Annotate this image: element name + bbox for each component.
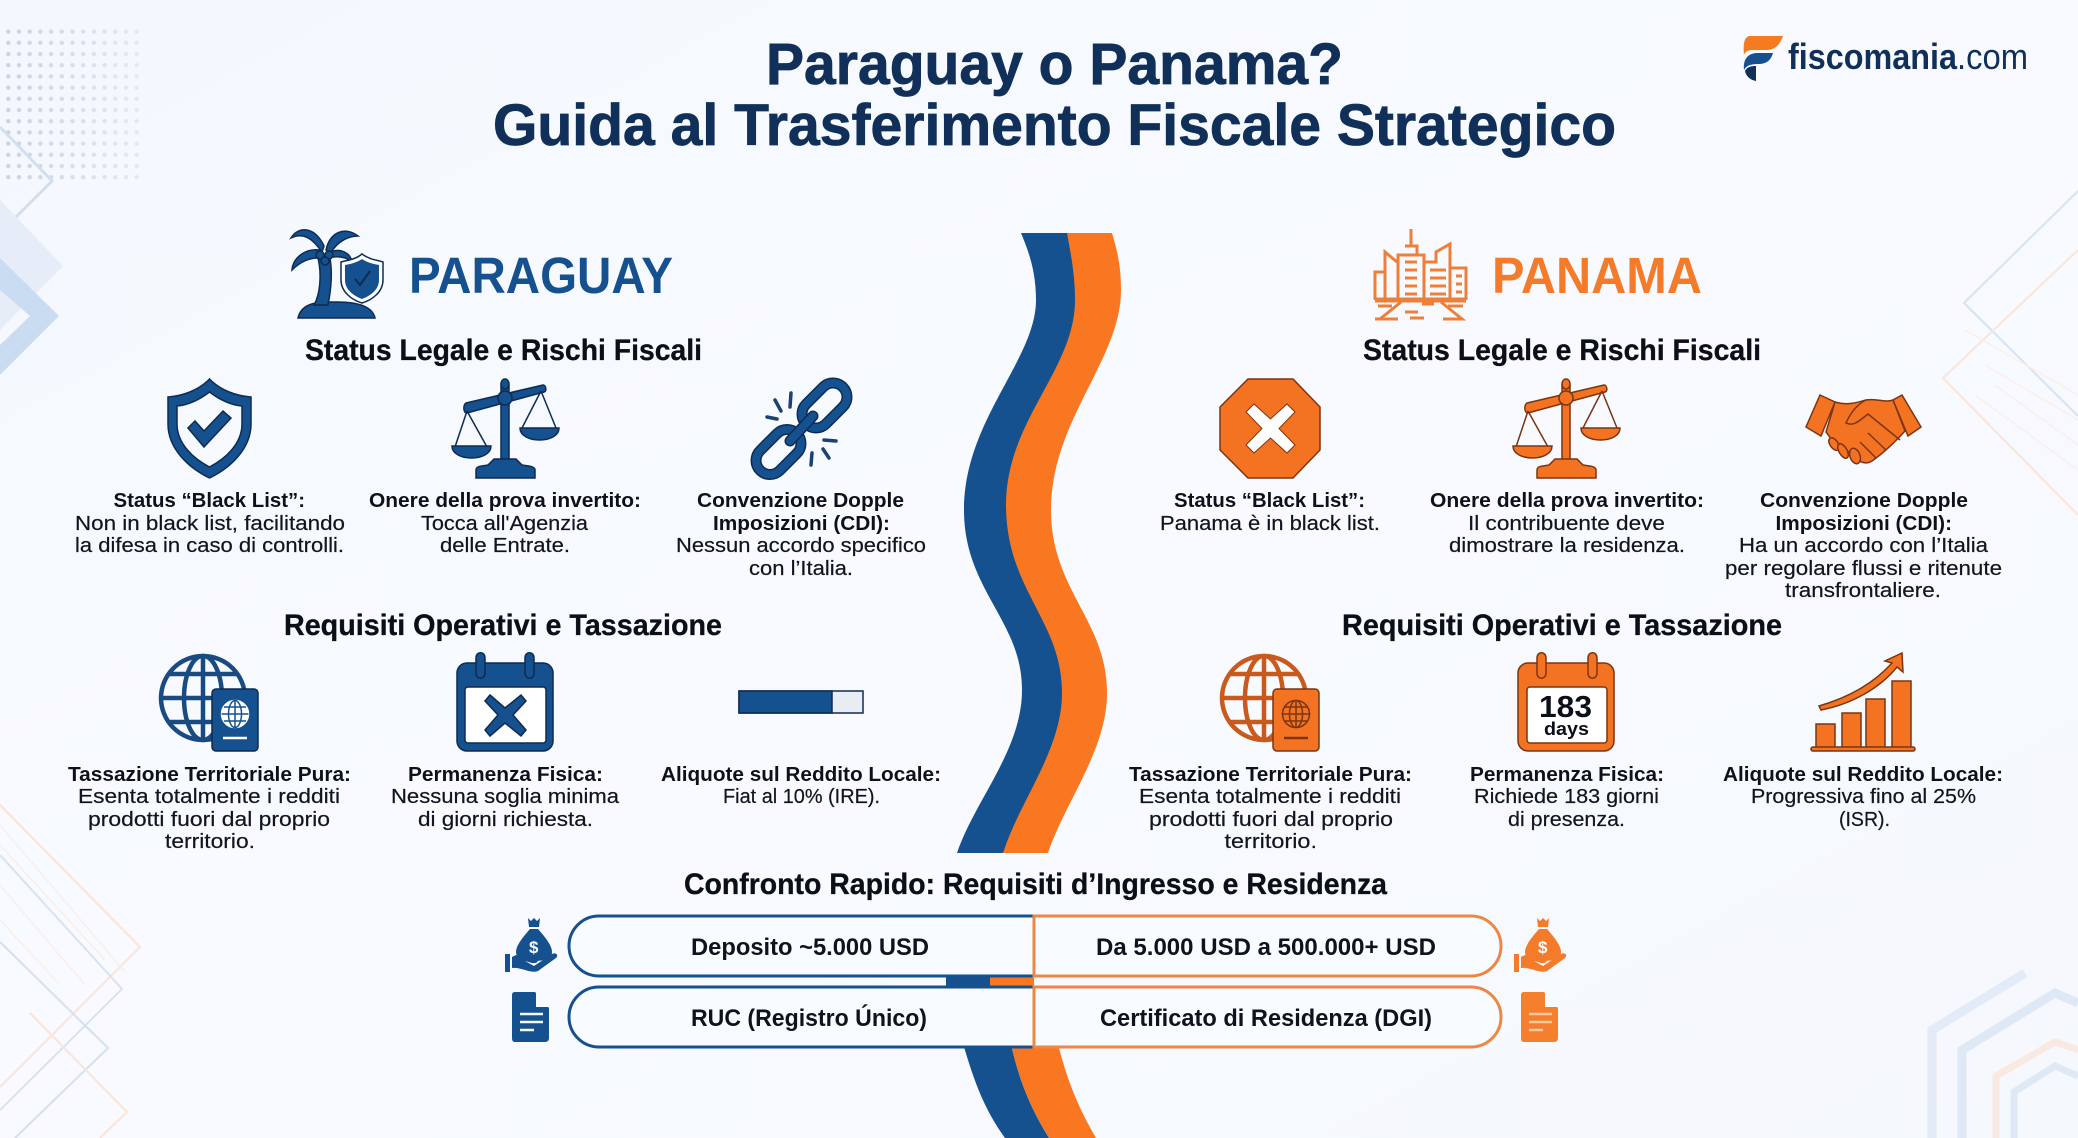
text: tassazione: Esenta totalmente i redditi: [78, 785, 340, 808]
text: status black list: Panama è in black list.: [1160, 512, 1380, 535]
text: aliquote: Progressiva fino al 25%: [1751, 785, 1976, 808]
row: deposit: [569, 916, 1501, 976]
text: onere della prova: Tocca all'Agenzia: [421, 512, 589, 535]
text: tassazione: territorio.: [1224, 830, 1317, 853]
text: permanenza: di presenza.: [1508, 808, 1625, 831]
panel: Panama: [1129, 229, 2003, 853]
text: aliquote: Aliquote sul Reddito Locale:: [661, 763, 941, 786]
text: permanenza: [391, 763, 620, 831]
icon: calendar 183 days: 183: [1539, 689, 1592, 724]
brand domain: .com: [1957, 36, 2028, 77]
icon: globe and passport: [161, 656, 258, 751]
brand name: fiscomania: [1788, 36, 1958, 77]
heading: status: Status Legale e Rischi Fiscali: [305, 334, 702, 367]
text: onere della prova: [369, 489, 641, 557]
text: convenzione: transfrontaliere.: [1785, 579, 1941, 602]
text: tassazione: Tassazione Territoriale Pura:: [68, 763, 351, 786]
text: tassazione: prodotti fuori dal proprio: [88, 808, 330, 831]
text: convenzione: Imposizioni (CDI):: [1776, 512, 1952, 535]
text: convenzione: Ha un accordo con l’Italia: [1739, 534, 1989, 557]
text: aliquote: Fiat al 10% (IRE).: [723, 785, 880, 808]
heading: confronto: Confronto Rapido: Requisiti d’Ingresso e Residenza: [684, 868, 1388, 901]
title: Paraguay o Panama?: [766, 32, 1343, 97]
icon: handshake: [1806, 395, 1921, 465]
heading: status: Status Legale e Rischi Fiscali: [1363, 334, 1761, 367]
icon: scales: [1513, 379, 1620, 478]
text: status black list: Status “Black List”:: [1174, 489, 1365, 512]
icon: calendar 183 days: [1518, 653, 1614, 751]
text: onere della prova: dimostrare la residenza.: [1449, 534, 1685, 557]
text: onere della prova: Il contribuente deve: [1468, 512, 1665, 535]
logo: fiscomania: [1744, 36, 2028, 81]
text: status black list: [1160, 489, 1380, 535]
text: tassazione: prodotti fuori dal proprio: [1149, 808, 1393, 831]
panel: Paraguay: [68, 230, 941, 853]
text: tassazione: [68, 763, 351, 853]
text: permanenza: Permanenza Fisica:: [408, 763, 603, 786]
row: registration: [569, 987, 1501, 1047]
text: convenzione: [676, 489, 926, 580]
text: permanenza: Richiede 183 giorni: [1474, 785, 1659, 808]
text: convenzione: Imposizioni (CDI):: [713, 512, 890, 535]
text: convenzione: con l’Italia.: [749, 557, 853, 580]
icon: calendar x: [457, 653, 553, 751]
text: permanenza: [1470, 763, 1664, 831]
background decoration: bottom right: [1932, 973, 2078, 1138]
icon: rising bar chart: [1811, 653, 1915, 751]
text: onere della prova: Onere della prova invertito:: [1430, 489, 1704, 512]
text: status black list: Status “Black List”:: [114, 489, 305, 512]
text: onere della prova: Onere della prova invertito:: [369, 489, 641, 512]
text: aliquote: (ISR).: [1839, 808, 1890, 831]
text: status black list: [75, 489, 345, 557]
background decoration: top left: [0, 26, 140, 375]
text: convenzione: Nessun accordo specifico: [676, 534, 926, 557]
heading: requisiti: Requisiti Operativi e Tassazione: [284, 609, 722, 642]
text: onere della prova: [1430, 489, 1704, 557]
icon: palm and shield: [291, 230, 383, 318]
text: convenzione: per regolare flussi e ritenute: [1725, 557, 2002, 580]
icon: money bag blue: $: [529, 938, 539, 957]
central ribbon: [946, 233, 1121, 1138]
icon: city skyline: [1375, 229, 1466, 319]
row: registration: Certificato di Residenza (DGI): [1100, 1005, 1432, 1032]
country name: PANAMA: [1492, 247, 1702, 304]
icon: shield check: [168, 379, 251, 478]
text: tassazione: Esenta totalmente i redditi: [1139, 785, 1401, 808]
text: status black list: Non in black list, facilitando: [75, 512, 345, 535]
background decoration: bottom left: [0, 805, 140, 1138]
country name: PARAGUAY: [409, 247, 673, 304]
text: permanenza: Nessuna soglia minima: [391, 785, 620, 808]
row: registration: RUC (Registro Único): [691, 1004, 927, 1032]
icon: octagon x: [1220, 379, 1320, 478]
icon: broken chain: [750, 377, 853, 480]
text: tassazione: territorio.: [165, 830, 255, 853]
title: [493, 32, 1616, 158]
text: convenzione: [1725, 489, 2002, 602]
row: deposit: Da 5.000 USD a 500.000+ USD: [1096, 934, 1436, 961]
icon: globe and passport: [1222, 656, 1319, 751]
text: onere della prova: delle Entrate.: [440, 534, 570, 557]
icon: document orange: [1521, 992, 1558, 1042]
row: deposit: Deposito ~5.000 USD: [691, 934, 929, 961]
text: aliquote: [661, 763, 941, 808]
text: convenzione: Convenzione Dopple: [697, 489, 904, 512]
text: aliquote: [1723, 763, 2003, 831]
icon: scales: [452, 379, 559, 478]
icon: money bag blue: [505, 918, 557, 972]
icon: progress bar 10%: [739, 691, 863, 713]
text: tassazione: [1129, 763, 1412, 853]
icon: money bag orange: $: [1538, 938, 1548, 957]
title: Guida al Trasferimento Fiscale Strategico: [493, 93, 1616, 158]
text: convenzione: Convenzione Dopple: [1760, 489, 1968, 512]
icon: document blue: [512, 992, 549, 1042]
icon: logo mark: [1744, 36, 1783, 81]
panel: quick comparison: [505, 868, 1566, 1047]
text: permanenza: Permanenza Fisica:: [1470, 763, 1664, 786]
text: aliquote: Aliquote sul Reddito Locale:: [1723, 763, 2003, 786]
heading: requisiti: Requisiti Operativi e Tassazione: [1342, 609, 1782, 642]
text: permanenza: di giorni richiesta.: [418, 808, 593, 831]
text: tassazione: Tassazione Territoriale Pura:: [1129, 763, 1412, 786]
text: status black list: la difesa in caso di controlli.: [75, 534, 344, 557]
background decoration: right: [1943, 191, 2078, 515]
icon: money bag orange: [1514, 918, 1566, 972]
icon: calendar 183 days: days: [1544, 719, 1589, 739]
